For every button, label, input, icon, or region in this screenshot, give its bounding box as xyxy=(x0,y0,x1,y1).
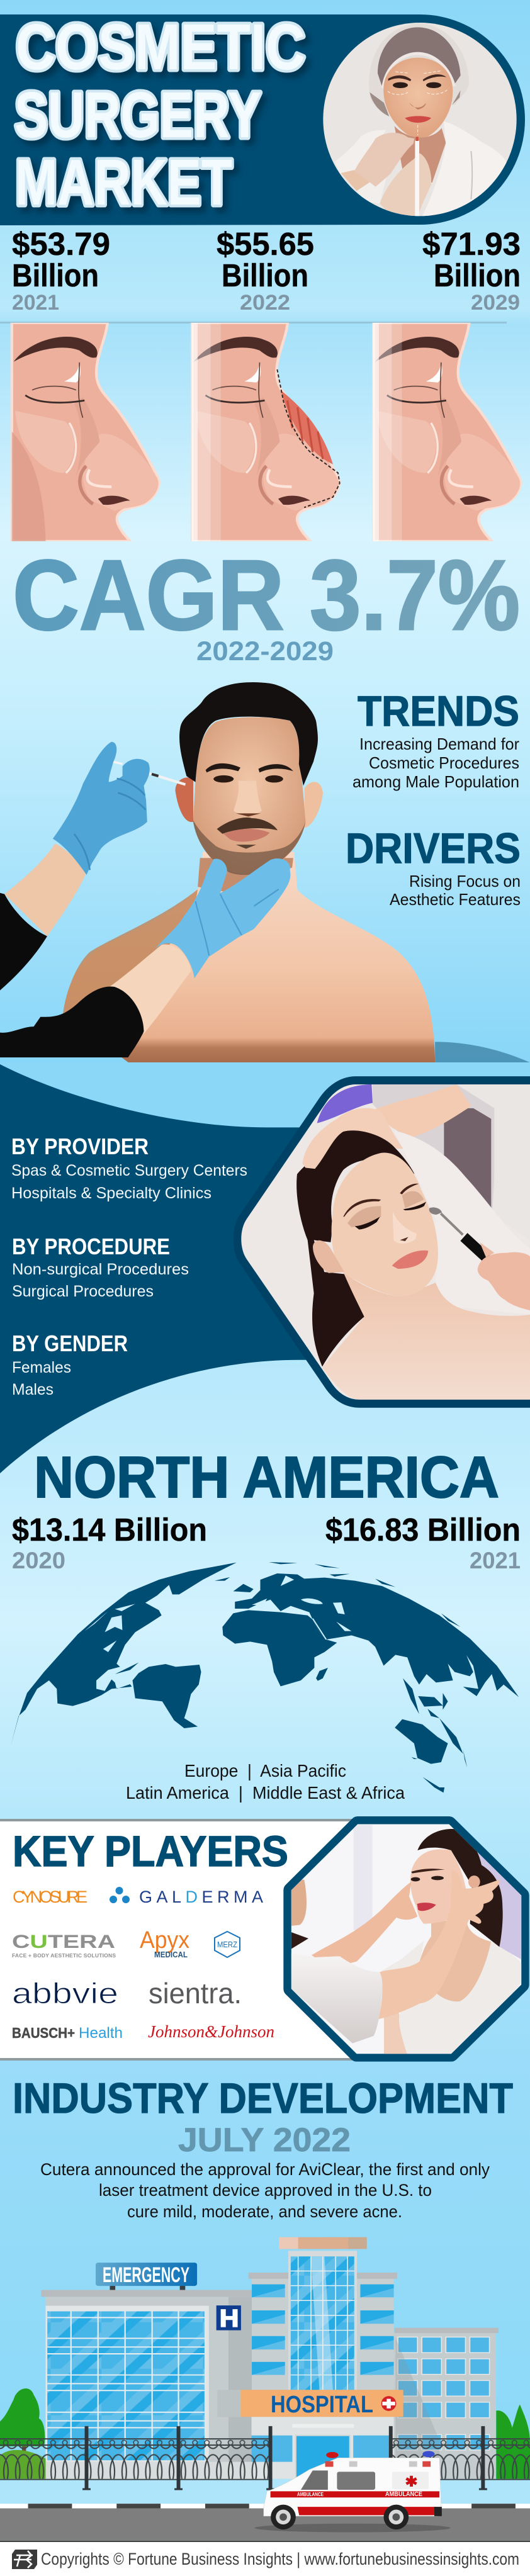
CAGR period: 2022-2029 xyxy=(196,636,334,666)
ambulance labels: AMBULANCE xyxy=(385,2491,422,2498)
H sign xyxy=(217,2305,241,2331)
head xyxy=(175,682,323,875)
other regions text: Europe | Asia Pacific xyxy=(184,1761,346,1780)
north america 2021 value xyxy=(325,1512,521,1573)
by gender: Males xyxy=(12,1381,54,1398)
stat 2022: Billion xyxy=(222,257,308,293)
market value statistics xyxy=(12,226,521,315)
by procedure xyxy=(12,1234,189,1300)
logo: Bausch Health: Health xyxy=(79,2025,123,2042)
stat 2022: $55.65 xyxy=(217,226,314,262)
other regions text: Latin America | Middle East & Africa xyxy=(126,1783,405,1803)
navy segmentation shape xyxy=(0,1064,321,1473)
stat 2022: 2022 xyxy=(240,291,290,315)
trees xyxy=(0,2388,530,2479)
hudson bay xyxy=(104,1616,122,1632)
ambulance labels xyxy=(297,2491,422,2498)
eurasia land xyxy=(235,1573,519,1697)
by provider: BY PROVIDER xyxy=(11,1133,149,1159)
north america 2020 value: 2020 xyxy=(12,1548,65,1573)
heading: KEY PLAYERS xyxy=(13,1827,288,1876)
entrance xyxy=(252,2417,394,2479)
hospital label: HOSPITAL xyxy=(271,2392,373,2418)
australia land xyxy=(395,1719,448,1764)
header panel xyxy=(0,11,525,225)
logo: AbbVie: abbvie xyxy=(12,1977,118,2010)
fence xyxy=(0,2426,530,2489)
logo: Cutera: FACE + BODY AESTHETIC SOLUTIONS xyxy=(12,1952,116,1959)
stat 2021 xyxy=(12,226,110,315)
north america 2020 value xyxy=(12,1512,207,1573)
south america land xyxy=(133,1664,201,1728)
north america heading: NORTH AMERICA xyxy=(34,1444,499,1510)
left building xyxy=(42,2290,252,2479)
logo: Merz xyxy=(215,1932,240,1957)
drivers text xyxy=(346,824,521,909)
title: SURGERY xyxy=(14,79,261,151)
footer xyxy=(0,2542,530,2576)
logo: Apyx Medical: Apyx xyxy=(140,1927,189,1954)
by procedure: Non-surgical Procedures xyxy=(12,1261,189,1278)
north america 2021 value: $16.83 Billion xyxy=(325,1512,521,1548)
stat 2029: 2029 xyxy=(471,291,520,315)
photo: woman at mirror xyxy=(290,1823,522,2055)
title: COSMETIC xyxy=(16,11,305,83)
segmentation panel xyxy=(0,1062,530,1473)
development description: Cutera announced the approval for AviClear, the first and only xyxy=(40,2160,490,2179)
by procedure: BY PROCEDURE xyxy=(12,1234,170,1259)
logo: Cynosure: CYNOSURE xyxy=(13,1887,87,1906)
logo: Bausch Health: BAUSCH+ xyxy=(12,2025,75,2041)
north america 2021 value: 2021 xyxy=(470,1548,521,1573)
caribbean and iceland xyxy=(115,1562,460,1674)
by gender: Females xyxy=(12,1359,71,1376)
logo: Apyx Medical: MEDICAL xyxy=(154,1950,188,1959)
by gender xyxy=(12,1330,128,1398)
right building xyxy=(394,2328,499,2479)
by provider: Hospitals & Specialty Clinics xyxy=(11,1184,211,1202)
logo: Cutera xyxy=(12,1932,116,1959)
ambulance xyxy=(254,2451,451,2533)
central wings xyxy=(249,2273,397,2479)
trends text: Cosmetic Procedures xyxy=(369,753,519,772)
emergency sign xyxy=(96,2263,197,2290)
nose illustrations xyxy=(0,322,521,541)
shoulder and neck shading xyxy=(63,858,293,1015)
header navy band xyxy=(0,14,525,225)
title xyxy=(14,11,305,218)
development description xyxy=(40,2160,490,2221)
development date: JULY 2022 xyxy=(178,2122,351,2159)
emergency label: EMERGENCY xyxy=(103,2263,189,2287)
inland seas xyxy=(252,1575,351,1640)
photo: woman receiving injection xyxy=(323,23,517,217)
british isles xyxy=(234,1584,254,1592)
drivers text: Rising Focus on xyxy=(409,872,521,891)
raised arm with syringe xyxy=(0,742,186,991)
logo: Merz: MERZ xyxy=(217,1940,237,1949)
development description: cure mild, moderate, and severe acne. xyxy=(127,2202,402,2221)
central tower xyxy=(279,2237,367,2390)
title: MARKET xyxy=(15,146,232,218)
logo: Sientra: sientra. xyxy=(149,1977,242,2010)
madagascar xyxy=(316,1668,328,1681)
by procedure: Surgical Procedures xyxy=(12,1283,154,1300)
trends text: among Male Population xyxy=(352,772,519,791)
africa land xyxy=(222,1610,337,1686)
trends text: Increasing Demand for xyxy=(359,734,519,753)
stat 2021: 2021 xyxy=(12,291,59,315)
logo: Johnson & Johnson: Johnson&Johnson xyxy=(148,2022,274,2041)
nose after surgery xyxy=(373,323,521,541)
by provider: Spas & Cosmetic Surgery Centers xyxy=(11,1162,247,1179)
other regions text xyxy=(126,1761,405,1803)
north america 2020 value: $13.14 Billion xyxy=(12,1512,207,1548)
stat 2029 xyxy=(422,226,521,315)
hospital sign xyxy=(240,2390,403,2417)
white band xyxy=(0,1820,441,2059)
logo: Bausch Health xyxy=(12,2025,123,2042)
ambulance labels: AMBULANCE xyxy=(297,2492,324,2497)
trends text: TRENDS xyxy=(358,687,519,735)
nose before surgery xyxy=(12,323,159,541)
footer logo xyxy=(12,2550,37,2569)
photo: woman facial treatment xyxy=(234,1083,530,1402)
photo: man receiving injection xyxy=(0,682,530,1062)
stat 2021: $53.79 xyxy=(12,226,110,262)
logo: Galderma: GALDERMA xyxy=(139,1887,263,1906)
by provider xyxy=(11,1133,247,1202)
key players panel xyxy=(0,1819,522,2061)
torso xyxy=(64,852,435,1062)
stat 2021: Billion xyxy=(12,257,99,293)
trends text xyxy=(352,687,519,791)
north america land xyxy=(11,1563,237,1745)
stat 2022 xyxy=(217,226,314,315)
supporting arm on neck xyxy=(0,858,290,1057)
sidewalk and road xyxy=(0,2479,530,2542)
nose with surgical marking xyxy=(191,323,340,541)
hospital illustration xyxy=(0,2237,530,2542)
by gender: BY GENDER xyxy=(12,1330,128,1356)
logo: Cutera: CUTERA xyxy=(12,1932,115,1952)
southeast asia islands xyxy=(403,1679,467,1792)
stat 2029: Billion xyxy=(434,257,521,293)
stat 2029: $71.93 xyxy=(422,226,521,262)
development description: laser treatment device approved in the U.S. to xyxy=(99,2181,432,2200)
drivers text: Aesthetic Features xyxy=(390,890,521,909)
world map xyxy=(11,1562,519,1792)
